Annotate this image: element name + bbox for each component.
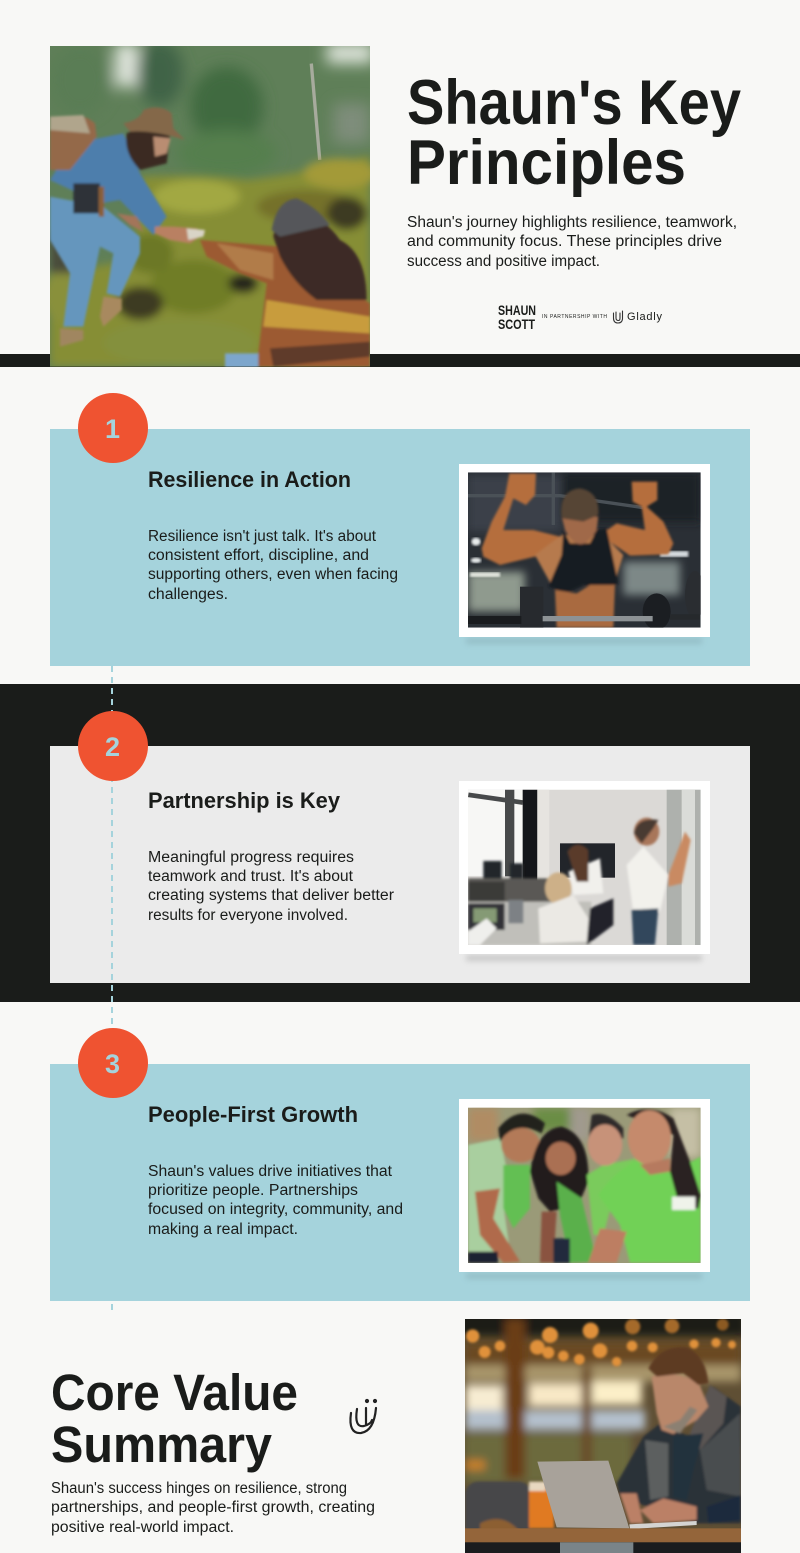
intro text: and community focus. These principles drive [407, 233, 722, 250]
logo: Shaun Scott: SCOTT [498, 316, 535, 332]
body 3: Shaun's values drive initiatives that [148, 1163, 393, 1180]
intro text: success and positive impact. [407, 253, 600, 270]
body 1: supporting others, even when facing [148, 566, 398, 583]
body 2 [148, 849, 394, 924]
logo: Shaun Scott: SHAUN [498, 302, 536, 318]
summary text: partnerships, and people-first growth, creating [51, 1499, 375, 1516]
body 2: creating systems that deliver better [148, 887, 394, 904]
photo: man on laptop [465, 1319, 741, 1553]
framed photo: office [459, 781, 710, 961]
heading 3: People-First Growth [148, 1102, 358, 1127]
panel 2: partnership [50, 746, 750, 983]
heading 1: Resilience in Action [148, 467, 351, 492]
heading 2: Partnership is Key [148, 788, 340, 813]
body 1: consistent effort, discipline, and [148, 547, 369, 564]
title [407, 68, 741, 198]
number badge 2 [78, 711, 148, 781]
intro text [407, 214, 737, 270]
body 3: focused on integrity, community, and [148, 1201, 403, 1218]
intro text: Shaun's journey highlights resilience, teamwork, [407, 214, 737, 231]
partner logos [498, 302, 662, 332]
timeline dashed connector [111, 666, 113, 1315]
core value summary heading [51, 1364, 298, 1473]
framed photo: volunteers [459, 1099, 710, 1279]
body 3: making a real impact. [148, 1221, 298, 1238]
panel 1: resilience [50, 429, 750, 666]
body 1: challenges. [148, 586, 228, 603]
body 2: Meaningful progress requires [148, 849, 354, 866]
body 1: Resilience isn't just talk. It's about [148, 528, 377, 545]
number badge 3: 3 [105, 1049, 120, 1079]
body 2: teamwork and trust. It's about [148, 868, 354, 885]
summary text: Shaun's success hinges on resilience, strong [51, 1480, 347, 1497]
header dark band [0, 354, 800, 367]
hero photo: hikers helping hand [43, 40, 377, 368]
body 2: results for everyone involved. [148, 907, 348, 924]
summary text: positive real-world impact. [51, 1519, 234, 1536]
title: Shaun's Key [407, 68, 741, 138]
number badge 1: 1 [105, 414, 120, 444]
dark section band [0, 684, 800, 1002]
woman [200, 240, 370, 367]
body 3: prioritize people. Partnerships [148, 1182, 358, 1199]
number badge 3 [78, 1028, 148, 1098]
man [50, 197, 140, 327]
framed photo: gym [459, 464, 710, 644]
body 3 [148, 1163, 403, 1238]
logo: Shaun Scott [498, 302, 536, 332]
number badge 1 [78, 393, 148, 463]
summary text [51, 1480, 375, 1536]
logo: Gladly: Gladly [627, 311, 662, 323]
panel 3: people-first [50, 1064, 750, 1301]
core value summary heading: Summary [51, 1416, 273, 1473]
number badge 2: 2 [105, 732, 120, 762]
partnership caption: IN PARTNERSHIP WITH [542, 314, 607, 320]
body 1 [148, 528, 398, 603]
core value summary heading: Core Value [51, 1364, 298, 1421]
title: Principles [407, 128, 686, 198]
icon: Gladly mark [350, 1400, 376, 1433]
